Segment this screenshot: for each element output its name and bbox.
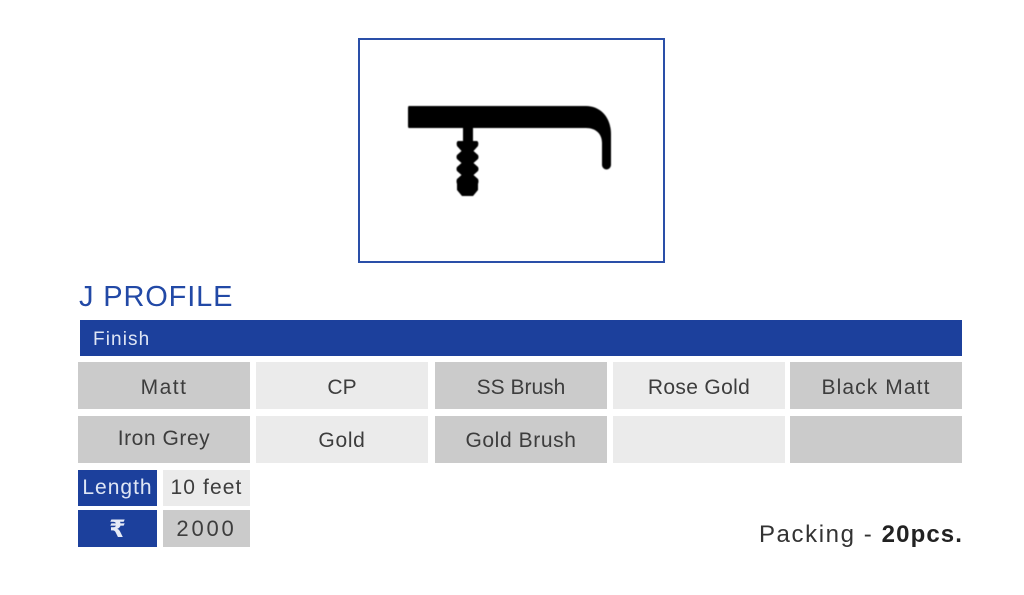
finish option: Gold <box>256 416 428 463</box>
finish option: Gold: Gold <box>318 429 366 452</box>
length value <box>163 470 250 506</box>
rupee symbol label: ₹ <box>109 516 126 543</box>
price value <box>163 510 250 547</box>
icon: J profile cross-section <box>407 105 612 197</box>
finish option: Matt: Matt <box>141 376 187 398</box>
finish option: Iron Grey: Iron Grey <box>118 427 210 450</box>
title: J PROFILE <box>79 281 233 313</box>
packing note: Packing - 20pcs. <box>759 521 963 548</box>
length value: 10 feet <box>171 476 242 499</box>
empty finish cell <box>790 416 962 463</box>
finish option: Rose Gold: Rose Gold <box>648 376 750 398</box>
finish header bar <box>80 320 962 356</box>
finish option: SS Brush: SS Brush <box>477 376 565 398</box>
finish option: CP <box>256 362 428 409</box>
empty finish cell <box>613 416 785 463</box>
finish option: CP: CP <box>327 376 357 398</box>
finish option: SS Brush <box>435 362 607 409</box>
finish option: Gold Brush <box>435 416 607 463</box>
finish option: Black Matt: Black Matt <box>821 376 931 398</box>
finish option: Matt <box>78 362 250 409</box>
finish header bar: Finish <box>93 329 150 350</box>
length label <box>78 470 157 506</box>
price value: 2000 <box>176 516 237 541</box>
finish option: Black Matt <box>790 362 962 409</box>
finish option: Gold Brush: Gold Brush <box>465 429 577 452</box>
length label: Length <box>82 476 153 498</box>
finish option: Iron Grey <box>78 416 250 463</box>
finish option: Rose Gold <box>613 362 785 409</box>
rupee symbol label <box>78 510 157 547</box>
product image frame <box>358 38 665 263</box>
